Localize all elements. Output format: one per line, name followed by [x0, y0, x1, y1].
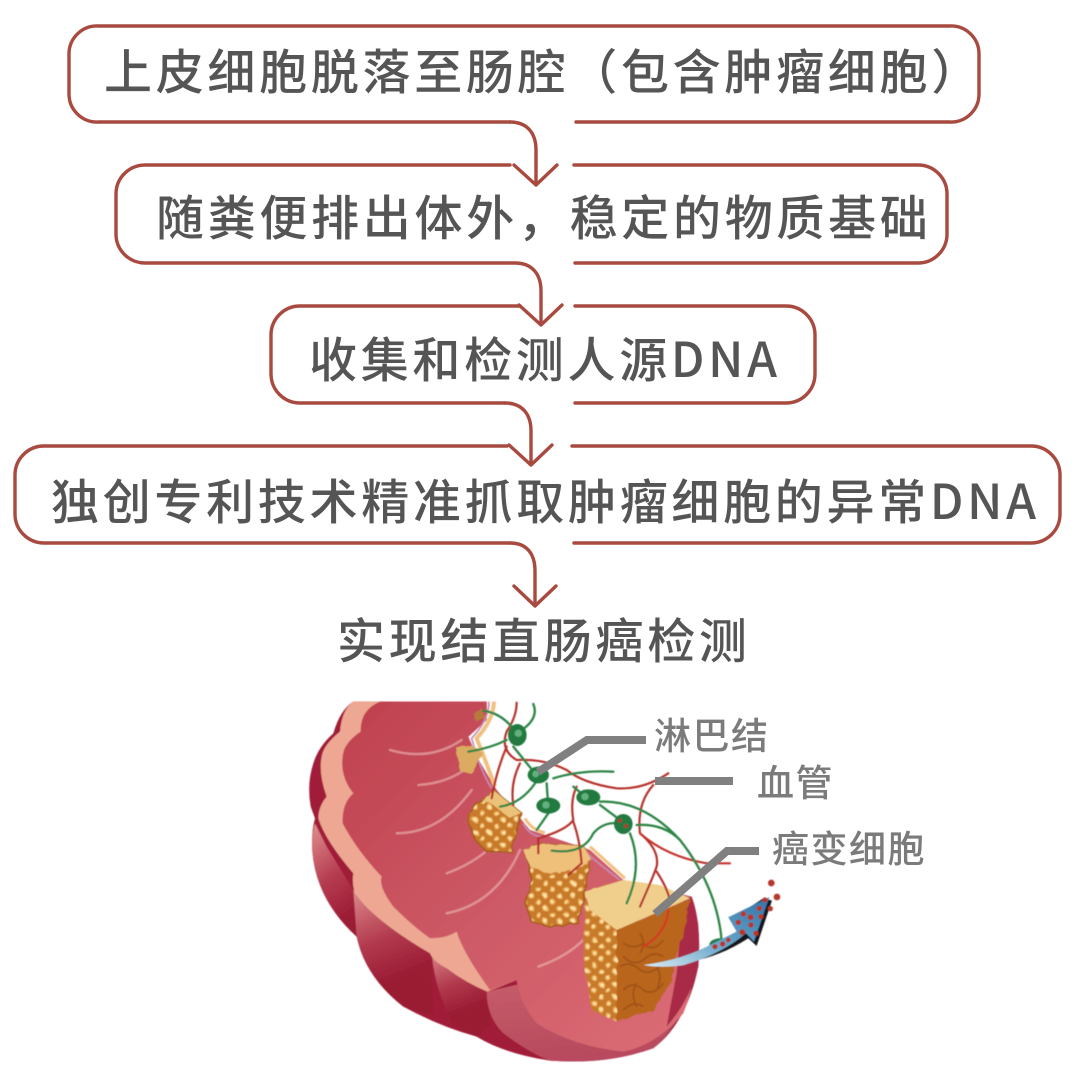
light rim [318, 702, 517, 992]
lymph vessels [468, 704, 722, 940]
label: cancer cell: 癌变细胞 [772, 819, 926, 873]
lumen fold highlights [390, 740, 583, 967]
leader line: blood vessel [655, 777, 733, 785]
flow box 1: 上皮细胞脱落至肠腔（包含肿瘤细胞） [104, 33, 983, 103]
wall fold 3 [432, 950, 490, 1037]
lumen [342, 702, 698, 1052]
label: blood vessel: 血管 [757, 753, 834, 807]
wall fold 2 [353, 890, 433, 1017]
wall fold 1 [312, 823, 357, 937]
leader line: cancer cell [655, 851, 759, 914]
flow box 2: 随粪便排出体外，稳定的物质基础 [156, 179, 932, 249]
blood vessels [492, 703, 730, 947]
crimson right edge [667, 897, 699, 1027]
flow box 3: 收集和检测人源DNA [309, 321, 781, 391]
arrow 3 [505, 403, 552, 465]
result heading: 实现结直肠癌检测 [337, 602, 751, 672]
metastatic arrow [618, 819, 780, 967]
colon illustration [309, 702, 780, 1062]
leader line: lymph node [538, 740, 646, 772]
arrow 2 [515, 263, 562, 325]
lymph nodes [508, 724, 731, 952]
arrow 1 [510, 122, 557, 185]
arrow 4 [510, 543, 556, 606]
mucosal edge [477, 702, 495, 787]
flow box 3 [271, 306, 815, 403]
outer colon wall [309, 702, 699, 1062]
flow box 4: 独创专利技术精准抓取肿瘤细胞的异常DNA [51, 463, 1040, 533]
tumours [456, 708, 690, 1022]
flow box 2 [116, 165, 947, 263]
label: lymph node: 淋巴结 [654, 706, 770, 760]
wall fold 4 [487, 967, 697, 1062]
flow box 4 [15, 446, 1060, 543]
